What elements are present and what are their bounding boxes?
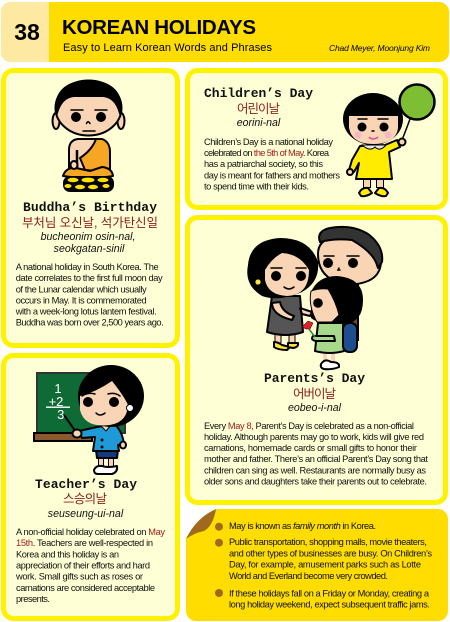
bullet: busy businesses: World and Everland become very crowded. xyxy=(229,571,388,581)
icon: teacher at chalkboard xyxy=(34,365,144,474)
romanization: seuseung-ui-nal xyxy=(48,508,124,520)
header banner: KOREAN HOLIDAYS xyxy=(62,16,256,39)
panel: Children's Day xyxy=(188,70,446,208)
body text: date correlates to the first full moon day xyxy=(16,273,163,283)
header banner: Chad Meyer, Moonjung Kim xyxy=(329,43,430,53)
romanization: eobeo-i-nal xyxy=(288,402,342,414)
body text: celebrated on the 5th of May. Korea xyxy=(204,148,330,158)
Korean term: 스승의날 xyxy=(63,492,107,506)
body text: Korea and this holiday is an xyxy=(16,549,119,559)
panel: Teacher's Day xyxy=(4,356,178,618)
body text: has a patriarchal society, so this xyxy=(204,159,323,169)
body text: holiday. Although parents may go to work, kids will give red xyxy=(204,432,424,442)
heading: Children's Day: Children’s Day xyxy=(204,86,313,101)
bullet: traffic jams: long holiday weekend, expect subsequent traffic jams. xyxy=(229,599,430,609)
body text: Buddha was born over 2,500 years ago. xyxy=(16,318,164,328)
Korean term: 어린이날 xyxy=(237,102,280,116)
body text xyxy=(15,262,164,328)
icon: teacher at chalkboard: +2 xyxy=(49,394,63,409)
body text: work. Small gifts such as roses or xyxy=(15,572,143,582)
body text: with a week-long lotus lantern festival. xyxy=(15,306,157,316)
icon: family with carnation xyxy=(247,227,382,369)
icon: child with balloon xyxy=(343,84,434,196)
body text: day is meant for fathers and mothers xyxy=(204,170,340,180)
panel: Parents' Day xyxy=(188,218,446,502)
bullet: busy businesses: Day, for example, amusement parks such as Lotte xyxy=(229,560,421,570)
bullet: busy businesses: Public transportation, shopping malls, movie theaters, xyxy=(229,537,427,547)
heading: Parents' Day: Parents’s Day xyxy=(264,371,365,386)
bullet: traffic jams xyxy=(215,588,430,609)
body text: appreciation of their efforts and hard xyxy=(16,561,150,571)
romanization: bucheonim osin-nal, xyxy=(41,231,135,243)
body text: 15th. Teachers are well-respected in xyxy=(16,538,153,548)
body text: Children’s Day is a national holiday xyxy=(204,137,333,147)
body text: to spend time with their kids. xyxy=(204,182,309,192)
body text xyxy=(15,527,165,604)
body text: children can sing as well. Restaurants are normally busy as xyxy=(204,465,426,475)
body text: carnations, homemade cards or small gifts to honor their xyxy=(204,443,417,453)
icon: teacher at chalkboard: 1 xyxy=(54,381,62,396)
heading: Buddha's Birthday: Buddha’s Birthday xyxy=(23,200,157,215)
header banner: 38 xyxy=(14,19,40,45)
body text: A non-official holiday celebrated on May xyxy=(16,527,165,537)
Korean term: 어버이날 xyxy=(293,387,336,401)
romanization line 2: seokgatan-sinil xyxy=(54,243,125,255)
icon: teacher at chalkboard: 3 xyxy=(57,407,64,422)
bullet: family month: May is known as family month in Korea. xyxy=(229,521,376,531)
body text: presents. xyxy=(16,594,50,604)
heading: Teacher's Day: Teacher’s Day xyxy=(35,477,137,492)
header banner: Easy to Learn Korean Words and Phrases xyxy=(63,42,272,54)
icon: seated Buddha xyxy=(52,80,124,192)
body text xyxy=(204,421,428,486)
bullet: busy businesses xyxy=(215,537,432,581)
body text: older sons and daughters take their parents out to celebrate. xyxy=(204,476,427,486)
bullet: busy businesses: and other types of businesses are busy. On Children’s xyxy=(229,548,432,558)
body text: A national holiday in South Korea. The xyxy=(16,262,159,272)
header banner xyxy=(1,2,449,62)
body text: carnations are considered acceptable xyxy=(16,583,155,593)
body text xyxy=(204,137,340,192)
icon: folded corner xyxy=(186,509,216,539)
body text: of the Lunar calendar which usually xyxy=(16,284,147,294)
body text: mother and father. There’s an official Parent’s Day song that xyxy=(204,454,428,464)
panel: Buddha's Birthday xyxy=(4,70,178,346)
Korean term: 부처님 오신날, 석가탄신일 xyxy=(22,216,158,230)
romanization: eorini-nal xyxy=(237,117,281,129)
panel: notes xyxy=(186,509,448,621)
bullet: traffic jams: If these holidays fall on a Friday or Monday, creating a xyxy=(229,588,430,598)
body text: Every May 8, Parent’s Day is celebrated as a non-official xyxy=(204,421,414,431)
body text: occurs in May. It is commemorated xyxy=(16,295,147,305)
